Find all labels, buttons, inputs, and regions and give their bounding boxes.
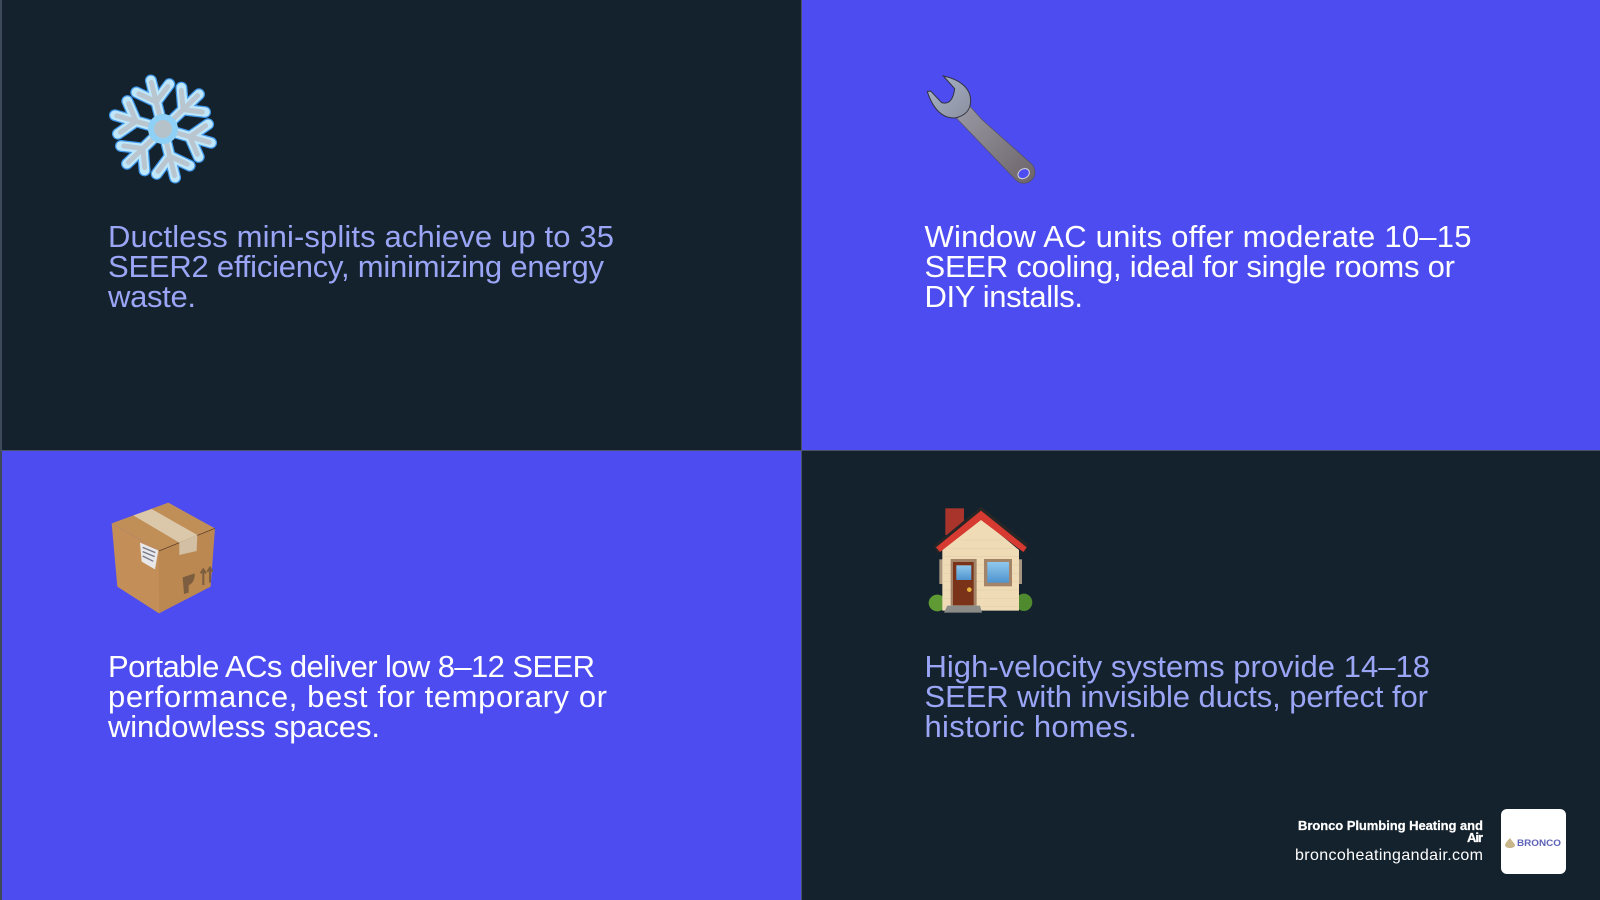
panel: high-velocity systems: [801, 450, 1600, 900]
text: company name: [1298, 818, 1483, 845]
text: high-velocity description: historic homes.: [924, 709, 1137, 744]
logo card: BRONCO: [1517, 838, 1561, 848]
text: website: broncoheatingandair.com: [1295, 847, 1483, 864]
text: ductless description: waste.: [107, 279, 196, 314]
text: high-velocity description: High-velocity systems provide 14–18: [924, 649, 1430, 684]
panel: portable AC: [0, 450, 801, 900]
text: high-velocity description: SEER with invisible ducts, perfect for: [924, 679, 1428, 714]
text: ductless description: Ductless mini-splits achieve up to 35: [108, 219, 614, 254]
icon: snowflake: [110, 76, 216, 182]
icon: house: [929, 507, 1032, 613]
panel: ductless mini-splits: [0, 0, 801, 450]
text: window AC description: Window AC units offer moderate 10–15: [924, 219, 1472, 254]
text: window AC description: DIY installs.: [924, 279, 1083, 314]
icon: cardboard box: [112, 503, 215, 613]
text: portable AC description: Portable ACs deliver low 8–12 SEER: [108, 649, 595, 684]
brand footer: [1295, 809, 1566, 874]
text: portable AC description: performance, best for temporary or: [108, 679, 607, 714]
text: company name: Air: [1467, 830, 1483, 845]
text: portable AC description: windowless spaces.: [107, 709, 380, 744]
text: company name: Bronco Plumbing Heating and: [1298, 818, 1483, 833]
text: window AC description: SEER cooling, ideal for single rooms or: [924, 249, 1455, 284]
logo card: [1501, 809, 1566, 874]
panel: window AC: [801, 0, 1600, 450]
icon: wrench: [927, 76, 1035, 183]
text: ductless description: SEER2 efficiency, minimizing energy: [108, 249, 604, 284]
